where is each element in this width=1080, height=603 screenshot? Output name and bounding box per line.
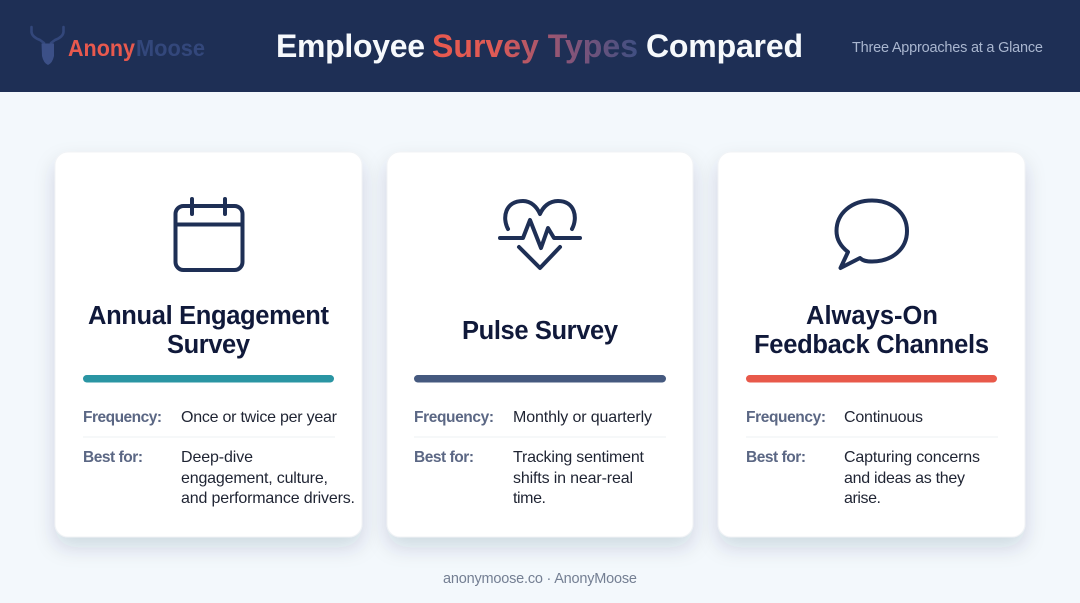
best for row: Best for: [83, 449, 143, 466]
heading: Annual Engagement [88, 302, 330, 330]
panel: always-on feedback channels [718, 152, 1025, 537]
frequency row: Continuous [844, 409, 923, 426]
icon: speech bubble [836, 200, 907, 268]
best for row: arise. [844, 490, 881, 507]
heading [88, 302, 330, 359]
heading [754, 302, 989, 359]
best for row [414, 449, 645, 507]
logo wordmark: Anony [68, 35, 135, 61]
coral divider bar [746, 375, 997, 382]
best for row: and performance drivers. [181, 490, 355, 507]
icon: calendar [176, 199, 242, 270]
heading: Feedback Channels [754, 331, 989, 359]
best for row: engagement, culture, [181, 470, 328, 487]
best for row: shifts in near-real [513, 470, 633, 487]
title: Survey Types [432, 28, 638, 64]
icon: heart with pulse [500, 201, 580, 268]
best for row: time. [513, 490, 546, 507]
icon: moose head [32, 27, 64, 65]
best for row: Tracking sentiment [513, 449, 645, 466]
best for row: Best for: [414, 449, 474, 466]
best for row [83, 449, 355, 507]
best for row: Deep-dive [181, 449, 253, 466]
title: Employee [276, 28, 425, 64]
heading: Survey [167, 331, 251, 359]
frequency row [83, 409, 338, 426]
logo wordmark [68, 35, 205, 61]
title: Compared [646, 28, 803, 64]
header band [0, 0, 1080, 92]
best for row: Best for: [746, 449, 806, 466]
heading: Always-On [806, 302, 938, 330]
teal divider bar [83, 375, 334, 382]
best for row: Capturing concerns [844, 449, 980, 466]
frequency row: Monthly or quarterly [513, 409, 652, 426]
logo wordmark: Moose [136, 35, 205, 61]
panel: pulse survey [387, 152, 693, 537]
subtitle: Three Approaches at a Glance [852, 40, 1043, 56]
panel: annual engagement survey [55, 152, 362, 537]
best for row [746, 449, 980, 507]
logo [32, 27, 205, 65]
frequency row: Frequency: [414, 409, 494, 426]
frequency row: Frequency: [746, 409, 826, 426]
heading: Pulse Survey [462, 317, 619, 345]
slate divider bar [414, 375, 666, 382]
frequency row [746, 409, 923, 426]
best for row: and ideas as they [844, 470, 965, 487]
footer: anonymoose.co · AnonyMoose [443, 571, 637, 587]
frequency row: Once or twice per year [181, 409, 338, 426]
frequency row [414, 409, 652, 426]
frequency row: Frequency: [83, 409, 162, 426]
title [276, 28, 803, 64]
